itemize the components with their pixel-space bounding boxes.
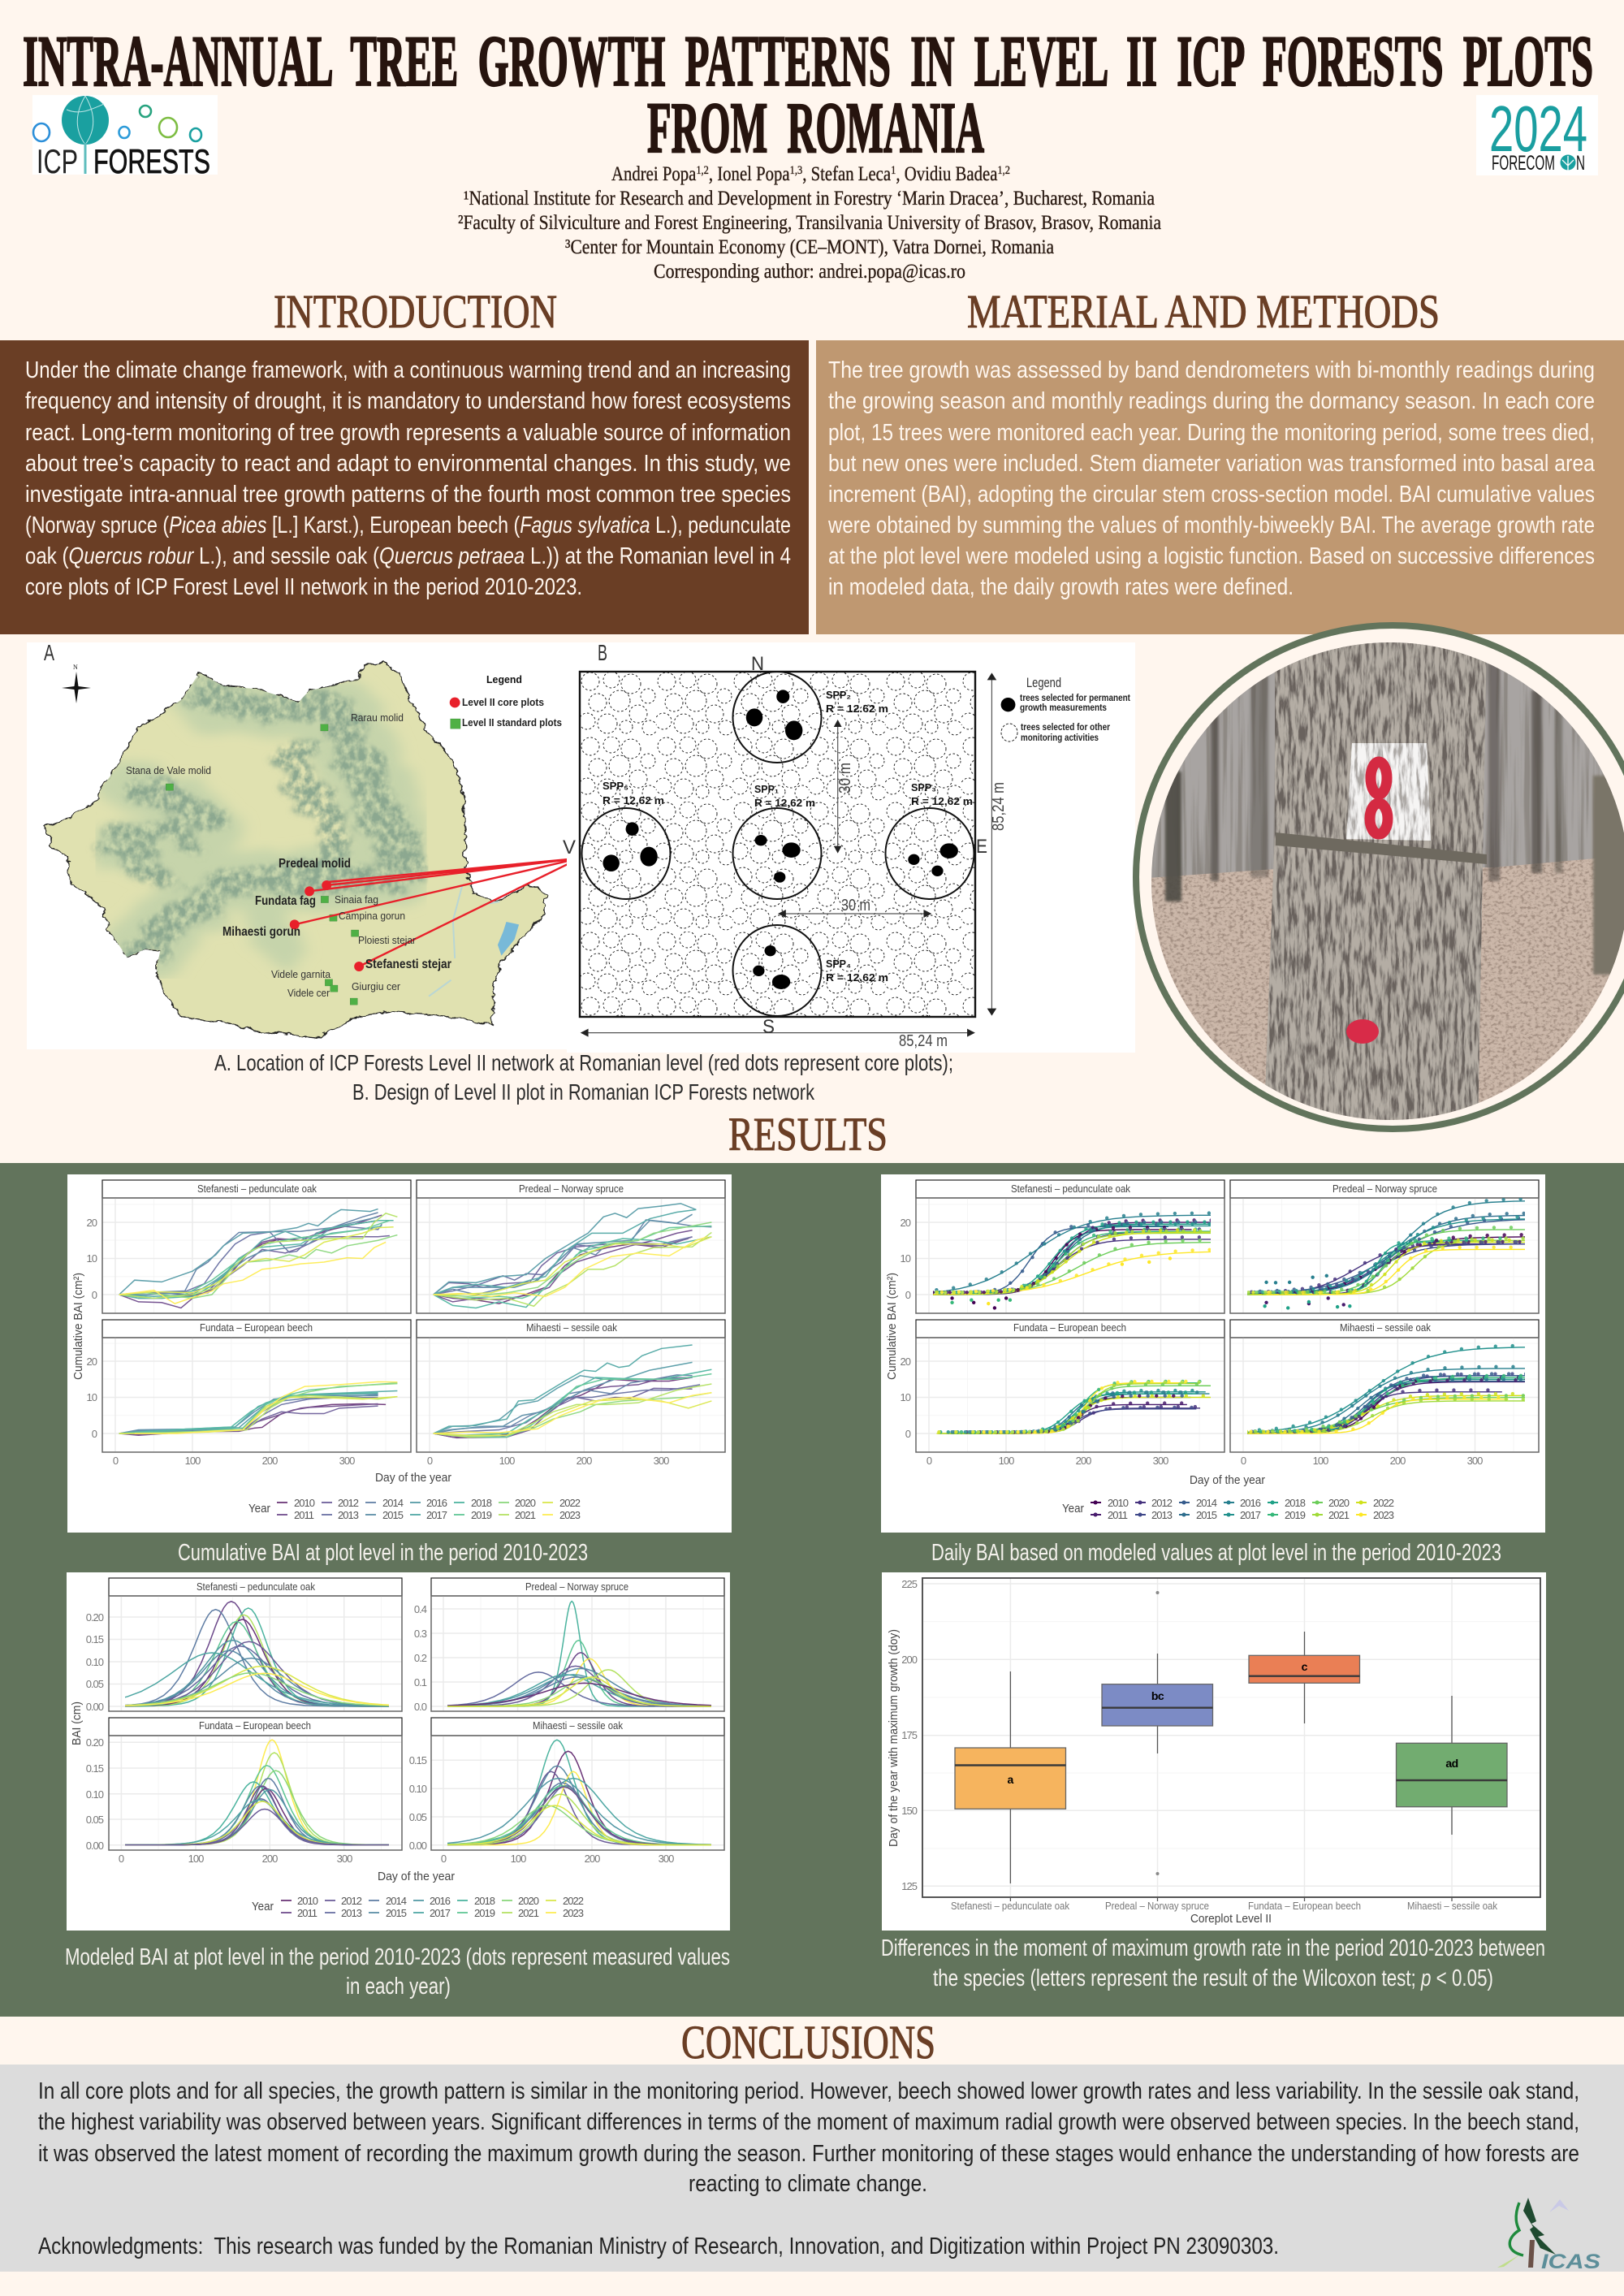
figure A: location map of Romania: Campina gorun: [339, 910, 405, 922]
figure A: location map of Romania: Videle garnita: [271, 968, 331, 980]
caption: boxplot: the species (letters represent the result of the Wilcoxon test; p < 0.05): [933, 1965, 1493, 1991]
chart: daily BAI modeled values with dots: Fundata – European beech: [1013, 1321, 1126, 1334]
caption: modeled BAI: [65, 1944, 730, 2000]
legend: year: 2015: [382, 1509, 404, 1521]
chart: daily BAI modeled values with dots: 20: [901, 1356, 911, 1368]
legend: year: 2013: [341, 1907, 362, 1919]
figure A: location map of Romania: Videle cer: [287, 987, 330, 999]
figure A: location map of Romania: Level II standard plots: [462, 716, 562, 729]
chart: boxplot of day of maximum growth: a: [1008, 1773, 1014, 1786]
figure B: design of Level II plot: N: [751, 653, 764, 675]
heading: results: RESULTS: [728, 1108, 888, 1161]
chart: boxplot of day of maximum growth: 200: [901, 1654, 918, 1666]
authors and affiliations: ³Center for Mountain Economy (CE–MONT), Vatra Dornei, Romania: [565, 236, 1054, 258]
caption: figure A and B: A. Location of ICP Forests Level II network at Romanian level (red dots represent core plots);: [214, 1050, 953, 1075]
legend: year with dots: 2010: [1108, 1497, 1129, 1509]
panel: Fundata curves: [937, 1381, 1217, 1433]
legend: year with dots: 2019: [1285, 1509, 1306, 1521]
figure B: design of Level II plot: 30 m: [841, 897, 870, 915]
panel: Stefanesti bells: [125, 1600, 389, 1707]
panel: Mihaesti bells: [447, 1739, 711, 1845]
panel: Fundata bells: [125, 1739, 389, 1845]
logo: 2024 FORECOMON: [1476, 93, 1598, 175]
chart: boxplot of day of maximum growth: Fundata – European beech: [1248, 1900, 1361, 1912]
figure A: location map of Romania: Level II core plots: [462, 696, 544, 708]
chart: daily BAI modeled values with dots: 10: [901, 1252, 911, 1265]
chart: boxplot of day of maximum growth: [882, 1572, 1546, 1931]
panel: Stefanesti curves: [933, 1211, 1211, 1310]
chart: cumulative BAI: Day of the year: [375, 1471, 451, 1485]
figure B: design of Level II plot: SPP₅: [603, 780, 628, 792]
figure B: design of Level II plot: E: [976, 836, 987, 858]
figure B: design of Level II plot: 85,24 m: [899, 1032, 948, 1050]
legend: year: 2012: [338, 1497, 359, 1509]
figure B: design of Level II plot: R = 12,62 m: [826, 971, 888, 984]
photo: band dendrometer on oak trunk: [1136, 625, 1624, 1137]
legend: year with dots: 2011: [1108, 1509, 1128, 1521]
legend: year: 2020: [515, 1497, 536, 1509]
panel: introduction: react. Long-term monitoring of tree growth represents a valuable source of information: [25, 420, 791, 446]
chart: daily BAI modeled values with dots: Day of the year: [1190, 1473, 1265, 1487]
map standard-plot markers: [166, 719, 460, 1005]
red painted number 8: [1370, 762, 1388, 834]
legend: year: 2018: [474, 1895, 495, 1907]
figure A: location map of Romania: Mihaesti gorun: [222, 925, 300, 939]
panel: introduction: investigate intra-annual tree growth patterns of the fourth most common tree species: [25, 482, 791, 508]
legend: year: 2022: [559, 1497, 581, 1509]
panel: Stefanesti lines: [119, 1209, 397, 1308]
sampling circles: [581, 672, 974, 1016]
figure A: location map of Romania: Legend: [486, 673, 522, 685]
red connector arrows to plot design: [295, 858, 580, 966]
legend: year: 2010: [297, 1895, 318, 1907]
legend: year: 2021: [515, 1509, 536, 1521]
figure B: design of Level II plot: SPP₄: [826, 958, 851, 970]
chart: cumulative BAI: 20: [87, 1217, 97, 1229]
legend: year: Year: [252, 1900, 274, 1913]
chart: modeled BAI bell curves: Day of the year: [378, 1870, 455, 1883]
chart: daily BAI modeled values with dots: 0: [905, 1289, 911, 1301]
caption: modeled BAI: in each year): [346, 1974, 451, 2000]
dendrometer band: [1276, 832, 1487, 864]
panel: introduction: oak (Quercus robur L.), and sessile oak (Quercus petraea L.)) at the Romanian level in 4: [25, 543, 791, 569]
panel: introduction: about tree’s capacity to react and adapt to environmental changes. In this study, we: [25, 451, 791, 477]
chart: modeled BAI bell curves: 0.15: [409, 1754, 427, 1766]
chart: modeled BAI bell curves: 0.05: [86, 1678, 104, 1690]
panel: material and methods: [816, 340, 1624, 634]
legend: year: [248, 1497, 581, 1521]
chart: cumulative BAI: Predeal – Norway spruce: [519, 1183, 624, 1195]
chart: modeled BAI bell curves: 0.4: [414, 1603, 427, 1615]
chart: modeled BAI bell curves: 0.10: [86, 1656, 104, 1668]
figure B: design of Level II plot: trees selected for other: [1021, 721, 1110, 733]
figure A: location map of Romania: Predeal molid: [279, 857, 351, 871]
legend: year: [252, 1895, 584, 1919]
chart: boxplot of day of maximum growth: Predeal – Norway spruce: [1105, 1900, 1209, 1912]
chart: modeled BAI bell curves: 0.20: [86, 1736, 104, 1749]
authors and affiliations: 1,2: [696, 164, 709, 177]
chart: cumulative BAI: 10: [87, 1391, 97, 1403]
figure A: location map of Romania: Stefanesti stejar: [365, 958, 451, 971]
chart: cumulative BAI: 0: [113, 1455, 119, 1467]
panel: introduction: core plots of ICP Forest Level II network in the period 2010-2023.: [25, 574, 582, 600]
chart: modeled BAI bell curves: 200: [262, 1853, 278, 1865]
figure A: location map of Romania: Fundata fag: [255, 894, 316, 908]
logo: 2024 FORECOMON: N: [1576, 152, 1585, 175]
figure A: location map of Romania: [27, 640, 580, 1049]
legend: year with dots: 2012: [1151, 1497, 1173, 1509]
authors and affiliations: 1,3: [790, 164, 802, 177]
chart: daily BAI modeled values with dots: 10: [901, 1391, 911, 1403]
chart: cumulative BAI: Mihaesti – sessile oak: [526, 1321, 617, 1334]
logo: ICP Forests: ICP: [37, 142, 78, 180]
chart: modeled BAI bell curves: Mihaesti – sessile oak: [533, 1719, 623, 1732]
legend: year with dots: 2023: [1373, 1509, 1394, 1521]
chart: modeled BAI bell curves: Fundata – European beech: [199, 1719, 311, 1732]
figure A: location map of Romania: Ploiesti stejar: [358, 934, 417, 946]
legend: year: 2014: [382, 1497, 404, 1509]
chart: boxplot of day of maximum growth: c: [1302, 1660, 1308, 1673]
logo: ICAS: [1497, 2198, 1600, 2273]
figure A: location map of Romania: Rarau molid: [351, 711, 404, 724]
caption: figure A and B: B. Design of Level II plot in Romanian ICP Forests network: [352, 1079, 815, 1105]
chart: daily BAI modeled values with dots: 20: [901, 1217, 911, 1229]
chart: boxplot of day of maximum growth: Coreplot Level II: [1190, 1912, 1272, 1926]
panel: material and methods: in modeled data, the daily growth rates were defined.: [828, 574, 1294, 600]
legend: year: 2019: [474, 1907, 495, 1919]
chart: modeled BAI bell curves: 0.1: [414, 1676, 427, 1688]
authors and affiliations: Andrei Popa: [611, 163, 714, 185]
box: Predeal: [1102, 1684, 1213, 1726]
dimension arrows: [581, 672, 996, 1037]
figure B: design of Level II plot: R = 12,62 m: [754, 797, 815, 809]
legend: year: 2017: [426, 1509, 447, 1521]
figure A: location map of Romania: Sinaia fag: [335, 893, 378, 906]
figure B: design of Level II plot: R = 12,62 m: [603, 794, 664, 806]
box: Mihaesti: [1397, 1743, 1507, 1807]
legend: year: 2011: [297, 1907, 317, 1919]
legend: year with dots: 2014: [1196, 1497, 1217, 1509]
chart: modeled BAI bell curves: [67, 1572, 730, 1931]
chart: boxplot of day of maximum growth: 225: [901, 1578, 918, 1590]
heading: introduction: INTRODUCTION: [274, 285, 557, 338]
caption: cumulative BAI: Cumulative BAI at plot level in the period 2010-2023: [178, 1540, 588, 1566]
chart: modeled BAI bell curves: 0.00: [409, 1840, 427, 1852]
legend: year with dots: 2018: [1285, 1497, 1306, 1509]
chart: cumulative BAI: 100: [499, 1455, 515, 1467]
legend: year with dots: [1062, 1497, 1394, 1521]
chart: modeled BAI bell curves: BAI (cm): [70, 1701, 84, 1745]
legend: year: 2016: [430, 1895, 451, 1907]
legend: year: 2023: [563, 1907, 584, 1919]
figure A: location map of Romania: Stana de Vale molid: [126, 764, 211, 776]
chart: cumulative BAI: 0: [427, 1455, 433, 1467]
legend: year: 2014: [386, 1895, 407, 1907]
chart: modeled BAI bell curves: 0.00: [86, 1840, 104, 1852]
chart: daily BAI modeled values with dots: 100: [999, 1455, 1014, 1467]
chart: cumulative BAI: 20: [87, 1356, 97, 1368]
chart: modeled BAI bell curves: 200: [585, 1853, 600, 1865]
authors and affiliations: [458, 163, 1161, 283]
authors and affiliations: , Stefan Leca: [802, 163, 891, 185]
chart: daily BAI modeled values with dots: Stefanesti – pedunculate oak: [1011, 1183, 1130, 1195]
chart: boxplot of day of maximum growth: bc: [1151, 1689, 1164, 1702]
chart: boxplot of day of maximum growth: 175: [901, 1729, 918, 1741]
chart: cumulative BAI: 10: [87, 1252, 97, 1265]
chart: cumulative BAI: Stefanesti – pedunculate oak: [197, 1183, 317, 1195]
chart: modeled BAI bell curves: 0.15: [86, 1633, 104, 1645]
heading: conclusions: CONCLUSIONS: [681, 2016, 935, 2069]
figure B: design of Level II plot: V: [563, 837, 576, 858]
chart: cumulative BAI: 200: [262, 1455, 278, 1467]
panel: introduction: (Norway spruce (Picea abies [L.] Karst.), European beech (Fagus sylvatica L.), pedunculate: [25, 512, 791, 538]
logo: ICAS: ICAS: [1541, 2251, 1600, 2273]
chart: cumulative BAI: 0: [92, 1428, 97, 1440]
panel: introduction: Under the climate change framework, with a continuous warming trend and an increasing: [25, 357, 791, 383]
figure B: design of Level II plot: growth measurements: [1020, 702, 1107, 713]
figure B: design of Level II plot: 30 m: [836, 763, 854, 793]
caption: boxplot: [881, 1935, 1545, 1991]
chart: modeled BAI bell curves: 0.3: [414, 1628, 427, 1640]
chart: daily BAI modeled values with dots: 300: [1467, 1455, 1483, 1467]
panel: conclusions: reacting to climate change.: [689, 2171, 927, 2197]
icon: compass: N: [73, 664, 78, 671]
legend: year with dots: 2021: [1328, 1509, 1350, 1521]
authors and affiliations: , Ovidiu Badea: [896, 163, 997, 185]
panel: results background: [0, 1163, 1624, 2017]
chart: daily BAI modeled values with dots: 200: [1076, 1455, 1091, 1467]
chart: boxplot of day of maximum growth: Mihaesti – sessile oak: [1407, 1900, 1497, 1912]
chart: cumulative BAI: Fundata – European beech: [200, 1321, 313, 1334]
chart: daily BAI modeled values with dots: Predeal – Norway spruce: [1332, 1183, 1437, 1195]
chart: modeled BAI bell curves: 0: [441, 1853, 447, 1865]
figure B: design of Level II plot: SPP₁: [754, 783, 779, 795]
chart: modeled BAI bell curves: Predeal – Norway spruce: [525, 1580, 628, 1593]
chart: daily BAI modeled values with dots: 0: [905, 1428, 911, 1440]
chart: cumulative BAI: [67, 1174, 732, 1533]
legend: year: 2023: [559, 1509, 581, 1521]
selected trees: [603, 690, 1015, 989]
legend: year with dots: 2016: [1240, 1497, 1261, 1509]
figure B: design of Level II plot: trees selected for permanent: [1020, 692, 1130, 703]
figure A: location map of Romania: A: [44, 640, 54, 665]
legend: year with dots: 2015: [1196, 1509, 1217, 1521]
chart: cumulative BAI: 0: [92, 1289, 97, 1301]
figure B: design of Level II plot: S: [762, 1016, 775, 1038]
legend: year: 2021: [518, 1907, 539, 1919]
panel: Predeal bells: [447, 1600, 711, 1707]
chart: modeled BAI bell curves: 0.00: [86, 1701, 104, 1713]
legend: year: 2019: [471, 1509, 492, 1521]
chart: modeled BAI bell curves: Stefanesti – pedunculate oak: [197, 1580, 315, 1593]
panel: introduction: [0, 340, 809, 634]
legend: year with dots: 2022: [1373, 1497, 1394, 1509]
box: Stefanesti: [955, 1748, 1065, 1809]
panel: Predeal curves: [1247, 1198, 1525, 1310]
figure B: design of Level II plot: R = 12,62 m: [911, 795, 973, 807]
chart: cumulative BAI: 300: [339, 1455, 355, 1467]
chart: cumulative BAI: 200: [577, 1455, 592, 1467]
main trunk with paint patch: [1263, 633, 1487, 1137]
chart: modeled BAI bell curves: 0.15: [86, 1762, 104, 1775]
panel: Fundata lines: [119, 1381, 397, 1435]
panel: Mihaesti curves: [1247, 1343, 1525, 1434]
chart: modeled BAI bell curves: 0.10: [409, 1783, 427, 1795]
legend: year: 2010: [294, 1497, 315, 1509]
logo: ICP Forests: [32, 95, 218, 180]
background trunks: [1165, 658, 1624, 975]
chart: modeled BAI bell curves: 300: [337, 1853, 352, 1865]
chart: daily BAI modeled values with dots: 300: [1153, 1455, 1168, 1467]
panel: Predeal lines: [434, 1204, 711, 1308]
whiskers and outliers: [1010, 1632, 1452, 1901]
chart: daily BAI modeled values with dots: 0: [926, 1455, 932, 1467]
caption: modeled BAI: Modeled BAI at plot level in the period 2010-2023 (dots represent measured values: [65, 1944, 730, 1970]
map core-plot markers: [290, 698, 460, 971]
legend: year with dots: 2013: [1151, 1509, 1173, 1521]
chart: cumulative BAI: 300: [654, 1455, 669, 1467]
authors and affiliations: 1,2: [997, 164, 1010, 177]
chart: modeled BAI bell curves: 100: [188, 1853, 204, 1865]
chart: modeled BAI bell curves: 0.20: [86, 1611, 104, 1624]
chart: modeled BAI bell curves: 0.10: [86, 1788, 104, 1801]
authors and affiliations: ¹National Institute for Research and Development in Forestry ‘Marin Dracea’, Bucharest, Romania: [464, 188, 1155, 210]
chart: daily BAI modeled values with dots: 0: [1241, 1455, 1246, 1467]
panel: introduction: frequency and intensity of drought, it is mandatory to understand how forest ecosystems: [25, 388, 791, 414]
legend: year: 2018: [471, 1497, 492, 1509]
panel: Mihaesti lines: [434, 1345, 711, 1438]
title: [23, 22, 1593, 168]
title: FROM ROMANIA: [647, 89, 984, 168]
legend: year: 2016: [426, 1497, 447, 1509]
chart: cumulative BAI: Cumulative BAI (cm²): [71, 1273, 85, 1380]
figure B: design of Level II plot: monitoring activities: [1021, 732, 1099, 743]
chart: cumulative BAI: 100: [185, 1455, 201, 1467]
authors and affiliations: Corresponding author: andrei.popa@icas.ro: [654, 261, 965, 283]
panel: conclusions: [0, 2065, 1624, 2273]
chart: boxplot of day of maximum growth: Day of the year with maximum growth (doy): [887, 1629, 901, 1847]
chart: boxplot of day of maximum growth: 150: [901, 1805, 918, 1817]
legend: year with dots: Year: [1062, 1502, 1084, 1516]
chart: boxplot of day of maximum growth: 125: [901, 1880, 918, 1892]
legend: year: 2013: [338, 1509, 359, 1521]
legend: year with dots: 2020: [1328, 1497, 1350, 1509]
legend: year: 2011: [294, 1509, 314, 1521]
legend: year with dots: 2017: [1240, 1509, 1261, 1521]
legend: year: 2022: [563, 1895, 584, 1907]
chart: daily BAI modeled values with dots: Mihaesti – sessile oak: [1340, 1321, 1431, 1334]
chart: boxplot of day of maximum growth: ad: [1445, 1757, 1458, 1770]
figure B: design of Level II plot: SPP₃: [911, 781, 936, 793]
legend: year: 2015: [386, 1907, 407, 1919]
chart: daily BAI modeled values with dots: 200: [1390, 1455, 1406, 1467]
legend: year: 2020: [518, 1895, 539, 1907]
chart: modeled BAI bell curves: 0.0: [414, 1701, 427, 1713]
authors and affiliations: , Ionel Popa: [709, 163, 790, 185]
heading: material and methods: MATERIAL AND METHODS: [967, 285, 1440, 338]
legend: year: 2017: [430, 1907, 451, 1919]
figure B: design of Level II plot: [563, 640, 1135, 1053]
box: Fundata: [1249, 1655, 1359, 1683]
logo: 2024 FORECOMON: FORECOM: [1492, 152, 1555, 175]
chart: boxplot of day of maximum growth: Stefanesti – pedunculate oak: [951, 1900, 1069, 1912]
figure A: location map of Romania: Giurgiu cer: [352, 980, 401, 992]
icon: compass: [62, 664, 91, 703]
chart: daily BAI modeled values with dots: 100: [1313, 1455, 1328, 1467]
chart: modeled BAI bell curves: 0: [119, 1853, 124, 1865]
figure B: design of Level II plot: R = 12.62 m: [826, 703, 888, 715]
figure B: design of Level II plot: SPP₂: [826, 689, 851, 701]
chart: modeled BAI bell curves: 0.05: [409, 1811, 427, 1823]
chart: daily BAI modeled values with dots: [881, 1174, 1545, 1533]
legend: year: Year: [248, 1502, 270, 1516]
caption: figure A and B: [214, 1050, 953, 1105]
chart: modeled BAI bell curves: 0.05: [86, 1814, 104, 1826]
icon: Danube delta lake: [498, 922, 519, 956]
legend: year: 2012: [341, 1895, 362, 1907]
chart: modeled BAI bell curves: 0.2: [414, 1652, 427, 1664]
authors and affiliations: 1: [891, 164, 896, 177]
chart: modeled BAI bell curves: 100: [511, 1853, 526, 1865]
acknowledgments: Acknowledgments: This research was funded by the Romanian Ministry of Research, Innovation, and Digitization within Project PN 23090303.: [38, 2233, 1279, 2259]
figure B: design of Level II plot: Legend: [1026, 675, 1061, 690]
chart: daily BAI modeled values with dots: Cumulative BAI (cm²): [885, 1273, 899, 1380]
logo: ICP Forests: FORESTS: [93, 142, 210, 180]
red mark: [1346, 1019, 1379, 1044]
authors and affiliations: ²Faculty of Silviculture and Forest Engineering, Transilvania University of Brasov, Brasov, Romania: [458, 212, 1161, 234]
figure B: design of Level II plot: B: [598, 640, 607, 665]
chart: modeled BAI bell curves: 300: [659, 1853, 674, 1865]
figure B: design of Level II plot: 85,24 m: [990, 782, 1008, 831]
